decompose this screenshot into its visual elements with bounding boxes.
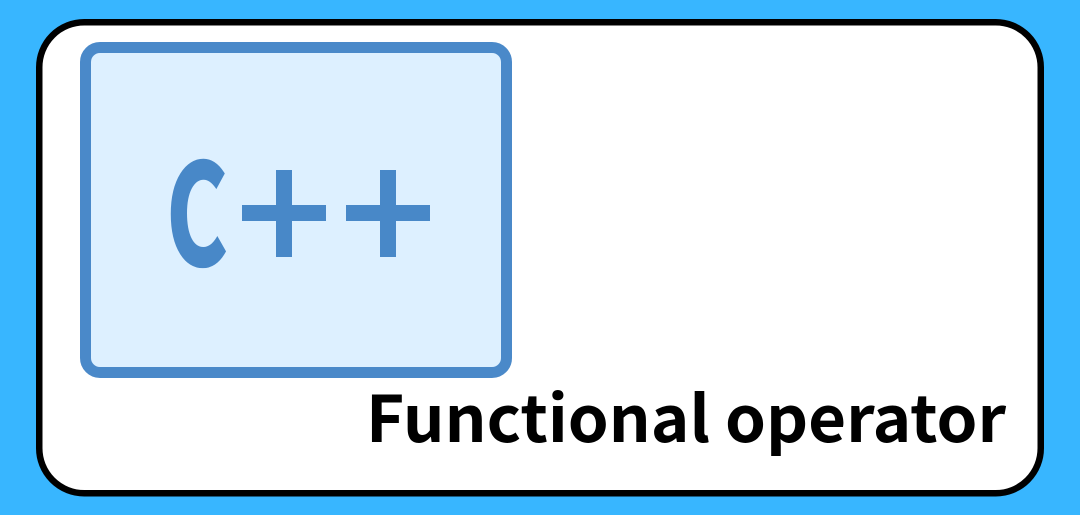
icon label: C++ bbox=[167, 140, 430, 280]
icon: C++ file window bbox=[80, 42, 512, 378]
